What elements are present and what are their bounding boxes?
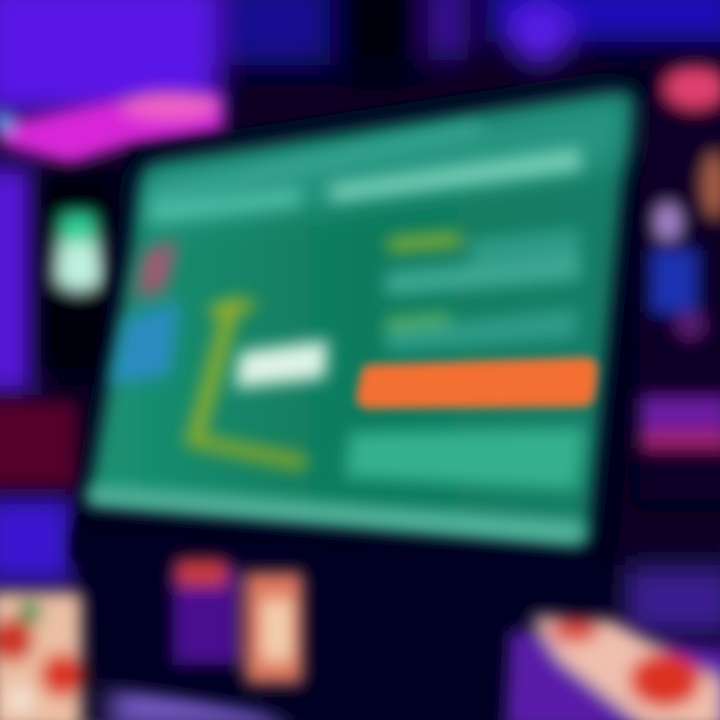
white chart label — [235, 340, 328, 388]
lower green panel — [345, 428, 585, 490]
keyboard stickers — [172, 558, 303, 684]
magenta light strip — [0, 91, 225, 165]
dark red shelf — [0, 400, 78, 488]
orange button — [357, 358, 597, 408]
glowing bottle — [42, 175, 110, 375]
screen — [88, 92, 632, 545]
left sidebar — [110, 240, 180, 385]
right side shelf items — [640, 60, 720, 500]
candy bottom left — [0, 592, 84, 720]
laptop bezel — [72, 68, 650, 610]
candy bottom right — [505, 615, 720, 720]
text rows — [385, 228, 580, 352]
laptop body — [72, 68, 650, 720]
laptop base — [72, 530, 610, 720]
bottom screen strip — [86, 486, 585, 545]
header text — [150, 122, 582, 222]
screen header band — [142, 95, 630, 235]
chart axis — [192, 305, 300, 462]
